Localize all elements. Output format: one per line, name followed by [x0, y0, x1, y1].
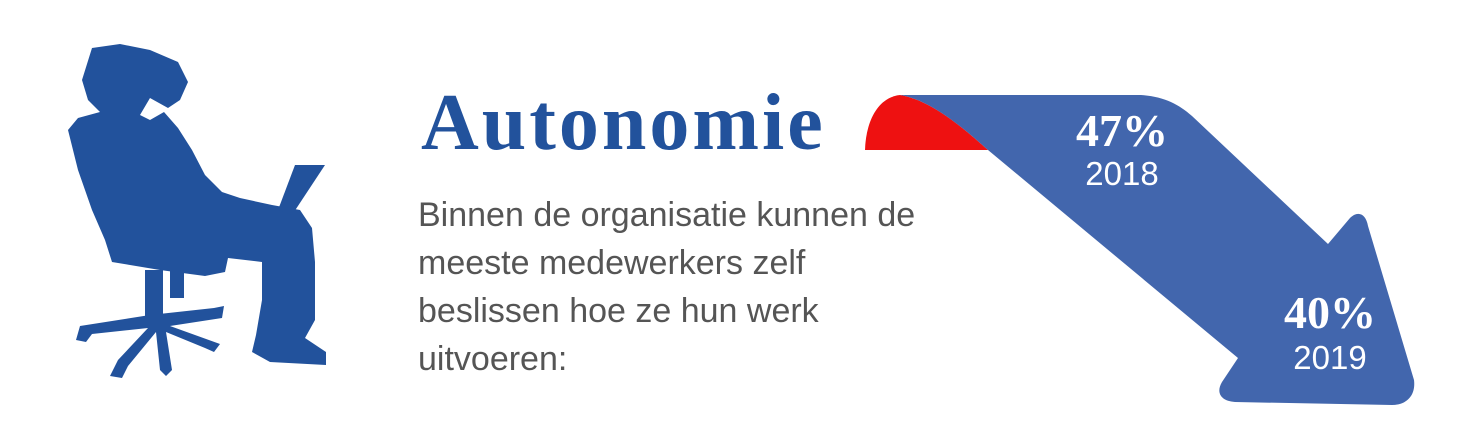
- blue arrow: [900, 95, 1414, 405]
- label: 47% 2018: [1076, 105, 1168, 192]
- body text: beslissen hoe ze hun werk: [418, 292, 819, 330]
- label: 40% 2019: 40%: [1284, 287, 1376, 338]
- label: 47% 2018: 2018: [1085, 155, 1159, 192]
- body text: Binnen de organisatie kunnen de: [418, 196, 915, 234]
- red segment: [865, 95, 988, 150]
- body text: [418, 196, 915, 378]
- label: 40% 2019: 2019: [1293, 339, 1367, 376]
- label: 40% 2019: [1284, 287, 1376, 376]
- icon: man in office chair with laptop: [68, 44, 326, 378]
- body text: uitvoeren:: [418, 340, 567, 378]
- title: Autonomie: [421, 79, 826, 167]
- label: 47% 2018: 47%: [1076, 105, 1168, 156]
- body text: meeste medewerkers zelf: [418, 244, 805, 282]
